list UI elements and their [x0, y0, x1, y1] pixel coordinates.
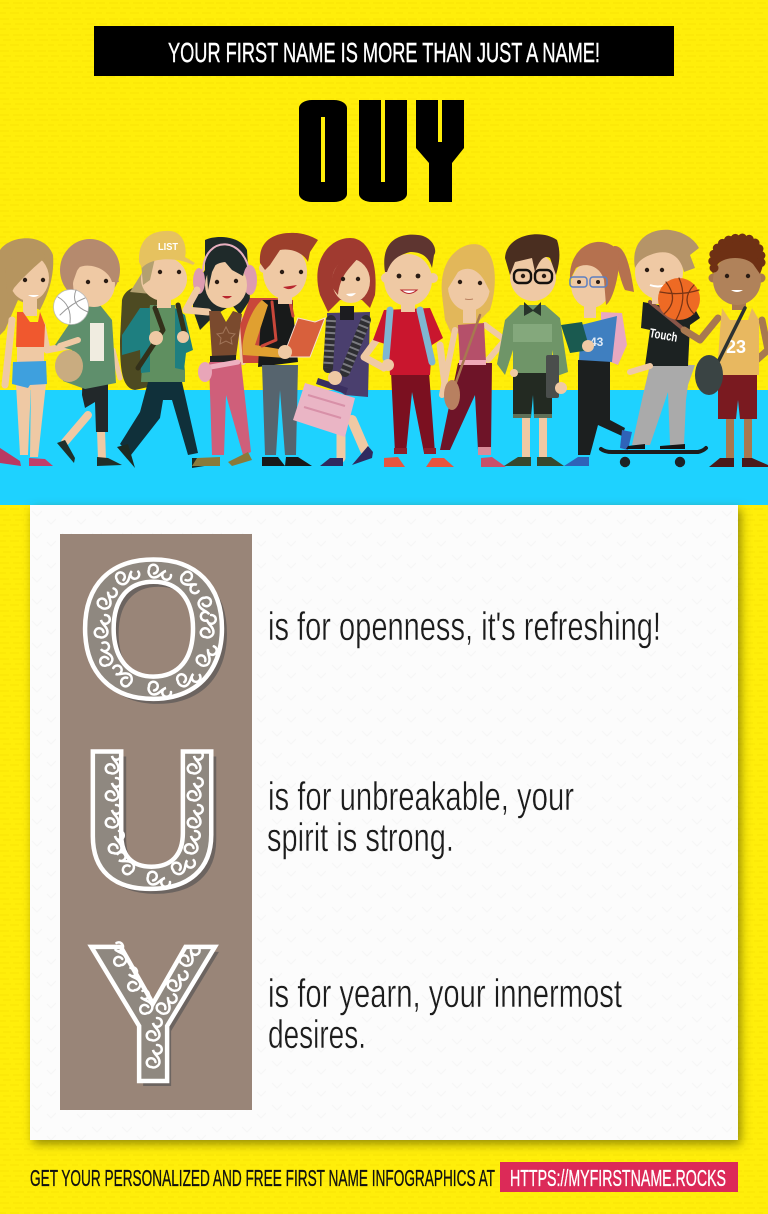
- ornamental letter Y: Y: [88, 905, 218, 1123]
- ornamental letter U: U: [81, 709, 223, 929]
- ornamental letter O: O: [82, 524, 235, 744]
- figure: skater with basketball: [601, 230, 706, 467]
- text block: U lines: spirit is strong.: [267, 816, 454, 860]
- title: OUY: U: [366, 101, 402, 204]
- text block: Y lines: desires.: [268, 1013, 366, 1057]
- ornamental letter U: U: [86, 714, 228, 934]
- title: OUY: O: [306, 102, 341, 204]
- panel: letter column: [60, 534, 252, 1110]
- figure: boy reading a book: [240, 233, 325, 466]
- text block: Y lines: is for yearn, your innermost: [268, 972, 622, 1016]
- figure: hiker with cap and backpack: LIST: [158, 242, 178, 253]
- figure: girl in orange top: [0, 238, 78, 466]
- figure: boy with glasses: [497, 234, 568, 466]
- figure: boy in red shirt: [364, 235, 454, 467]
- blue floor band: [0, 390, 768, 505]
- title: OUY: Y: [424, 94, 456, 211]
- figure: girl with pink case: [293, 238, 376, 466]
- figure: girl with ponytail and tablet: [561, 242, 634, 466]
- figure: boy with tank top and shoulder bag: [684, 235, 768, 467]
- text block: U lines: [267, 775, 574, 860]
- figure: girl with pink headphones: [186, 237, 257, 466]
- figure: blonde girl: [440, 244, 506, 467]
- figure: girl with ponytail and tablet: 43: [590, 335, 604, 349]
- title: OUY: [299, 94, 464, 211]
- header banner: [94, 26, 674, 76]
- figure: boy with tank top and shoulder bag: 23: [726, 337, 746, 357]
- ornamental letter O: O: [77, 519, 230, 739]
- text block: Y lines: [268, 972, 622, 1057]
- figure: skater with basketball: Touch: [648, 325, 679, 345]
- figure: girl with volleyball: [54, 239, 122, 466]
- ornamental letter Y: Y: [92, 910, 222, 1128]
- figure: hiker with cap and backpack: [117, 231, 217, 468]
- text block: U lines: is for unbreakable, your: [268, 775, 574, 819]
- panel: white content card: [30, 505, 738, 1140]
